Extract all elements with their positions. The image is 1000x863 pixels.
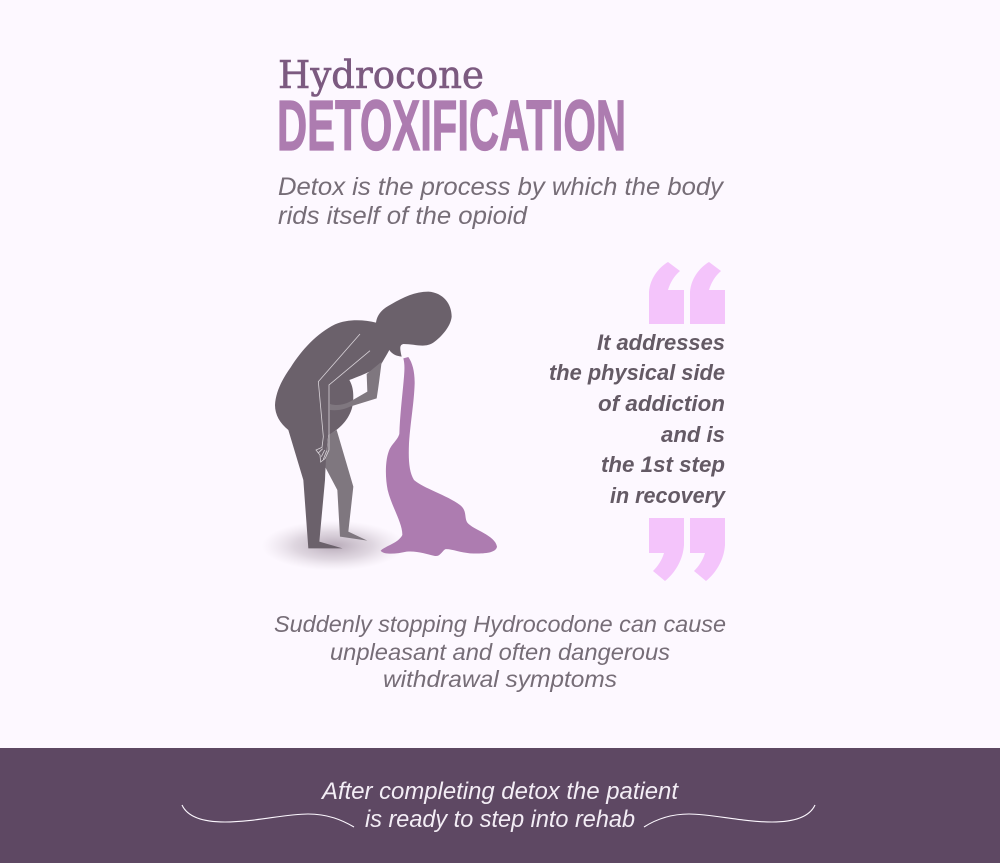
warning text <box>274 611 726 692</box>
body silhouette <box>275 292 452 548</box>
footer text: After completing detox the patient <box>320 778 679 805</box>
footer text <box>320 778 679 833</box>
flourishes <box>182 805 815 827</box>
floor shadow <box>262 521 405 571</box>
quote text: in recovery <box>610 483 727 508</box>
quote text <box>549 330 727 508</box>
illustration: person vomiting <box>262 292 497 571</box>
quote text: the 1st step <box>601 452 725 477</box>
opening quotation mark <box>649 262 725 324</box>
forearm <box>330 362 382 410</box>
intro text: rids itself of the opioid <box>278 202 528 230</box>
title: DETOXIFICATION <box>277 86 626 166</box>
quote text: of addiction <box>598 391 725 416</box>
title: Hydrocone <box>278 53 484 97</box>
intro text <box>278 173 725 230</box>
footer band <box>0 748 1000 863</box>
intro text: Detox is the process by which the body <box>278 173 725 201</box>
title <box>277 53 626 166</box>
warning text: withdrawal symptoms <box>383 666 617 692</box>
quote text: It addresses <box>597 330 725 355</box>
quote text: and is <box>661 422 725 447</box>
arm outline <box>316 334 370 462</box>
footer text: is ready to step into rehab <box>365 806 635 833</box>
closing quotation mark <box>649 518 725 581</box>
warning text: Suddenly stopping Hydrocodone can cause <box>274 611 726 637</box>
quote text: the physical side <box>549 360 725 385</box>
warning text: unpleasant and often dangerous <box>330 639 670 665</box>
vomit <box>381 357 497 556</box>
back leg <box>325 430 367 541</box>
